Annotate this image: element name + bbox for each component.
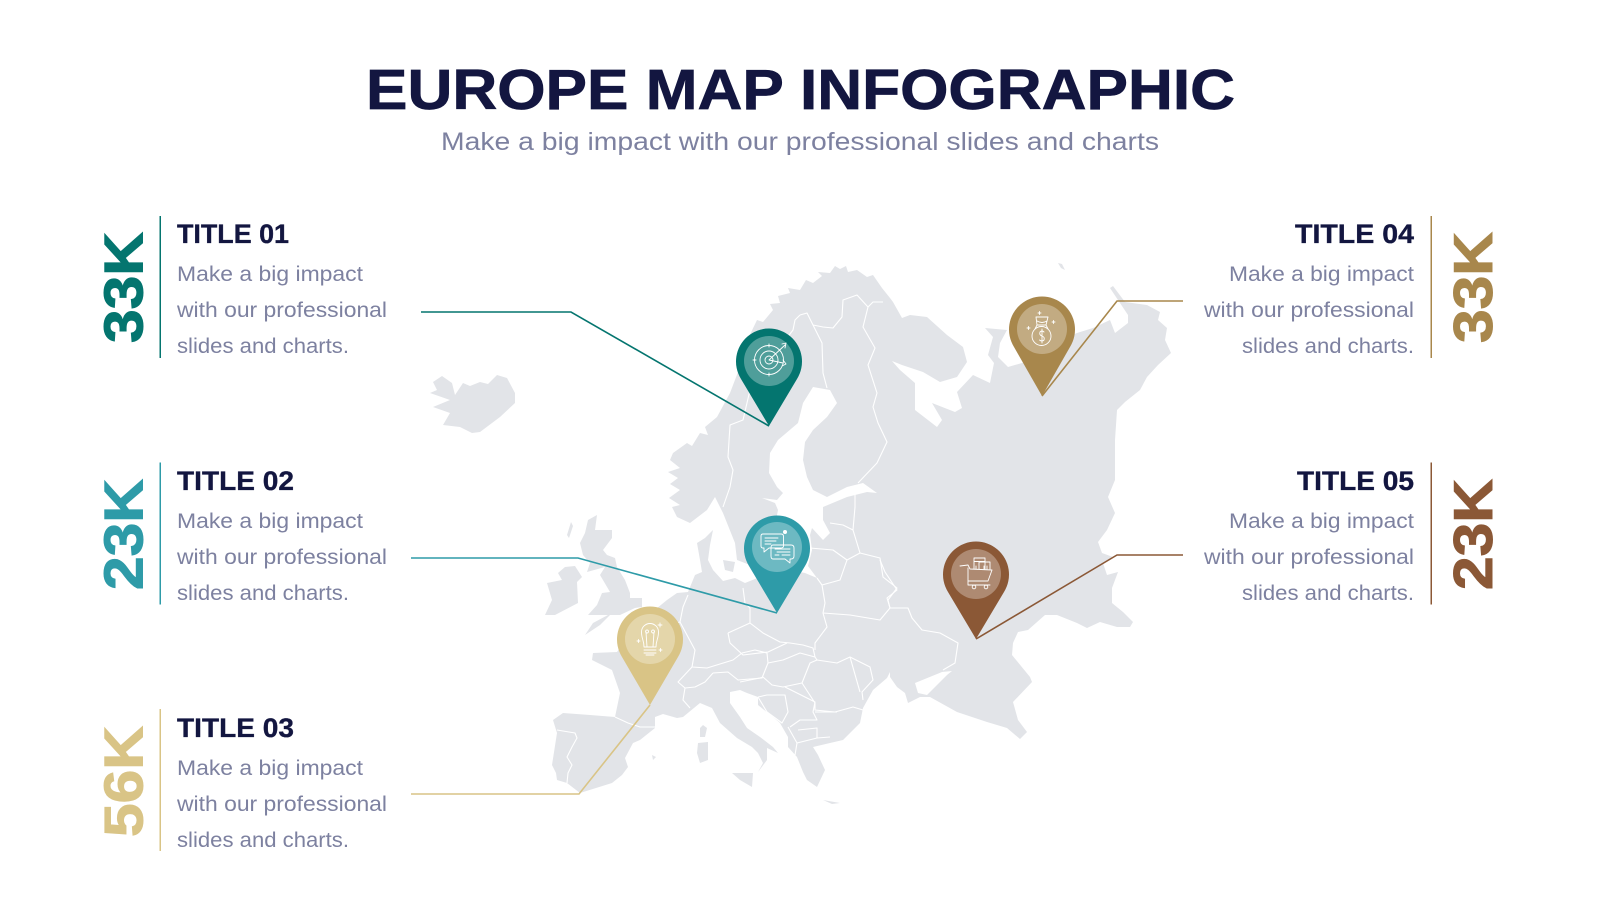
- pin 2: chat icon: [744, 516, 810, 613]
- heading: TITLE 03: [177, 713, 294, 743]
- body text: Make a big impact: [177, 509, 363, 533]
- block: title 01: [92, 216, 387, 358]
- body text: Make a big impact: [177, 262, 363, 286]
- block: title 03: [92, 709, 387, 852]
- body text: [176, 756, 387, 852]
- value 56K: 56K: [92, 726, 154, 837]
- europe map: [430, 263, 1171, 804]
- pin 1: target icon: [736, 329, 802, 426]
- heading: TITLE 05: [1297, 466, 1414, 496]
- body text: with our professional: [176, 545, 387, 569]
- pin 5: shopping cart icon: [943, 542, 1009, 639]
- mainland europe: [552, 266, 1171, 793]
- connector line: title 03: [411, 705, 650, 794]
- body text: Make a big impact: [1229, 509, 1414, 533]
- body text: slides and charts.: [177, 334, 349, 358]
- body text: Make a big impact: [177, 756, 363, 780]
- title: EUROPE MAP INFOGRAPHIC: [366, 58, 1235, 122]
- pin 3: light bulb icon: [617, 607, 683, 705]
- iceland: [430, 375, 515, 433]
- body text: slides and charts.: [177, 581, 349, 605]
- connector line: title 04: [1042, 301, 1183, 396]
- block: title 04: [1203, 216, 1504, 358]
- ireland: [545, 566, 582, 615]
- value 23K: 23K: [92, 479, 154, 590]
- body text: slides and charts.: [177, 828, 349, 852]
- connector line: title 02: [411, 558, 777, 613]
- value 33K: 33K: [92, 232, 154, 343]
- value 33K: 33K: [1442, 232, 1504, 343]
- body text: [176, 262, 387, 358]
- body text: with our professional: [1203, 545, 1414, 569]
- body text: with our professional: [176, 298, 387, 322]
- heading: TITLE 01: [177, 219, 289, 249]
- value 23K: 23K: [1442, 479, 1504, 590]
- body text: with our professional: [176, 792, 387, 816]
- heading: TITLE 04: [1295, 219, 1414, 249]
- body text: [1203, 262, 1414, 358]
- body text: [176, 509, 387, 605]
- block: title 02: [92, 462, 387, 605]
- small islands: [567, 263, 1065, 804]
- sea of azov: [915, 671, 952, 695]
- body text: slides and charts.: [1242, 334, 1414, 358]
- connector line: title 01: [421, 312, 769, 426]
- body text: with our professional: [1203, 298, 1414, 322]
- great britain: [580, 515, 642, 635]
- country borders: [557, 295, 958, 783]
- heading: TITLE 02: [177, 466, 294, 496]
- connector line: title 05: [976, 555, 1183, 639]
- body text: [1203, 509, 1414, 605]
- pin 4: money bag icon: [1009, 297, 1075, 396]
- block: title 05: [1203, 462, 1504, 605]
- body text: Make a big impact: [1229, 262, 1414, 286]
- subtitle: Make a big impact with our professional slides and charts: [441, 128, 1159, 156]
- body text: slides and charts.: [1242, 581, 1414, 605]
